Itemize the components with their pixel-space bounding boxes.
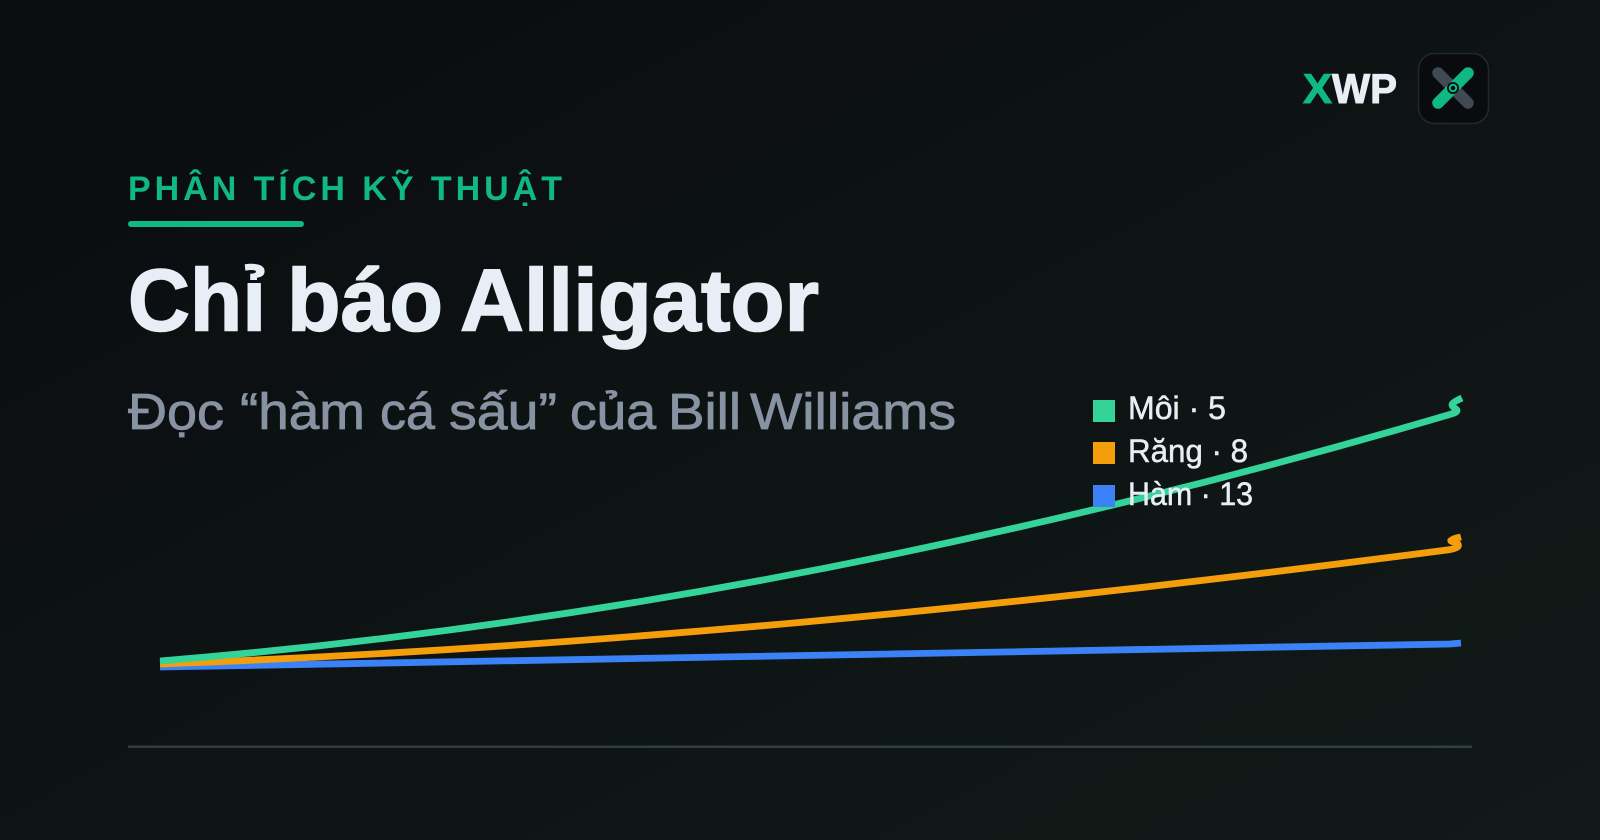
line: teeth (orange) <box>160 537 1461 664</box>
legend swatch: lips <box>1093 400 1115 422</box>
title <box>128 250 819 350</box>
subtitle: Bill <box>668 383 741 440</box>
legend label: teeth: Răng · 8 <box>1128 433 1248 469</box>
title: báo <box>287 250 443 350</box>
logo green bar <box>1438 73 1468 103</box>
legend swatch: jaw <box>1093 485 1115 507</box>
line: jaw (blue) <box>160 643 1461 667</box>
eyebrow underline <box>128 221 304 227</box>
line: lips (green) <box>160 398 1462 661</box>
eyebrow: section label: PHÂN TÍCH KỸ THUẬT <box>128 170 562 208</box>
logo badge <box>1418 54 1488 124</box>
logo grey bar <box>1438 73 1468 103</box>
subtitle: của <box>570 383 657 440</box>
subtitle: cá <box>380 383 436 440</box>
brand wordmark: WP <box>1332 65 1397 112</box>
logo centre ring <box>1447 82 1459 94</box>
title: Alligator <box>460 250 819 350</box>
title: Chỉ <box>128 250 266 350</box>
brand wordmark <box>1303 65 1397 112</box>
subtitle: sấu” <box>449 383 557 440</box>
subtitle: Williams <box>750 383 956 440</box>
legend swatch: teeth <box>1093 442 1115 464</box>
chart: alligator lines <box>160 398 1462 667</box>
legend label: lips: Môi · 5 <box>1128 390 1226 426</box>
subtitle: Đọc <box>128 383 224 440</box>
subtitle: “hàm <box>240 383 365 440</box>
subtitle <box>128 383 956 440</box>
axis baseline <box>128 746 1472 748</box>
brand wordmark: X <box>1303 65 1332 112</box>
legend <box>1093 390 1253 512</box>
legend label: jaw: Hàm · 13 <box>1128 476 1253 512</box>
